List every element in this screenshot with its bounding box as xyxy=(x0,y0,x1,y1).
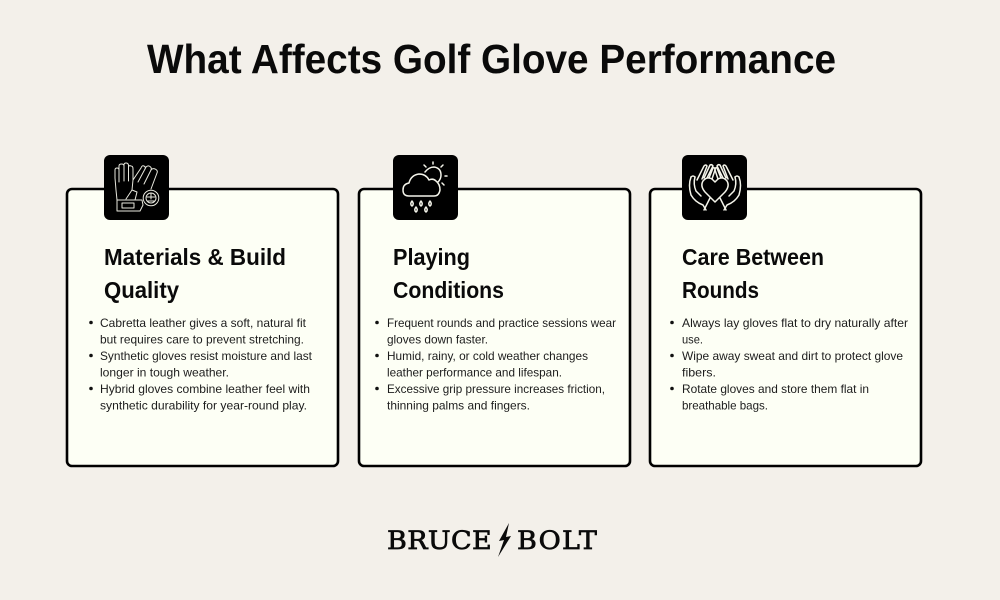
heading: Quality xyxy=(104,277,179,303)
bullet list xyxy=(89,317,313,412)
bullet list: but requires care to prevent stretching. xyxy=(100,334,304,346)
logo: Bruce Bolt: BOLT xyxy=(517,527,598,556)
bullet list: Rotate gloves and store them flat in xyxy=(682,383,869,396)
panel background xyxy=(359,189,630,466)
bullet list: gloves down faster. xyxy=(387,334,488,346)
bullet list: thinning palms and fingers. xyxy=(387,400,530,412)
bullet list: Excessive grip pressure increases friction, xyxy=(387,383,605,396)
bullet list: synthetic durability for year-round play. xyxy=(100,400,307,412)
bullet list xyxy=(375,317,616,412)
bullet list: fibers. xyxy=(682,366,716,380)
icon: hands holding heart xyxy=(682,155,747,220)
heading xyxy=(682,244,824,303)
panel background xyxy=(650,189,921,466)
panel: materials and build quality xyxy=(67,155,338,466)
bullet list: Hybrid gloves combine leather feel with xyxy=(100,383,310,396)
logo: Bruce Bolt xyxy=(387,523,598,557)
bullet list: Always lay gloves flat to dry naturally after xyxy=(682,317,908,330)
bullet list: Cabretta leather gives a soft, natural fit xyxy=(100,317,307,330)
title: What Affects Golf Glove Performance xyxy=(147,36,836,82)
bullet list: Frequent rounds and practice sessions wear xyxy=(387,317,616,330)
icon: sun, cloud and rain xyxy=(393,155,458,220)
bullet list: leather performance and lifespan. xyxy=(387,366,562,380)
icon: lightning bolt xyxy=(498,523,511,557)
panel: care between rounds xyxy=(650,155,921,466)
panel: playing conditions xyxy=(359,155,630,466)
heading: Materials & Build xyxy=(104,244,286,270)
bullet list: longer in tough weather. xyxy=(100,366,229,380)
icon: golf glove xyxy=(104,155,169,220)
heading: Care Between xyxy=(682,244,824,270)
heading: Rounds xyxy=(682,277,759,303)
heading: Playing xyxy=(393,244,470,270)
heading xyxy=(104,244,286,303)
bullet list: Wipe away sweat and dirt to protect glove xyxy=(682,350,903,363)
bullet list xyxy=(670,317,908,412)
logo: Bruce Bolt: BRUCE xyxy=(387,527,492,556)
bullet list: Synthetic gloves resist moisture and last xyxy=(100,350,313,363)
panel background xyxy=(67,189,338,466)
bullet list: use. xyxy=(682,334,703,346)
bullet list: Humid, rainy, or cold weather changes xyxy=(387,350,588,363)
bullet list: breathable bags. xyxy=(682,400,768,412)
heading: Conditions xyxy=(393,277,504,303)
heading xyxy=(393,244,504,303)
